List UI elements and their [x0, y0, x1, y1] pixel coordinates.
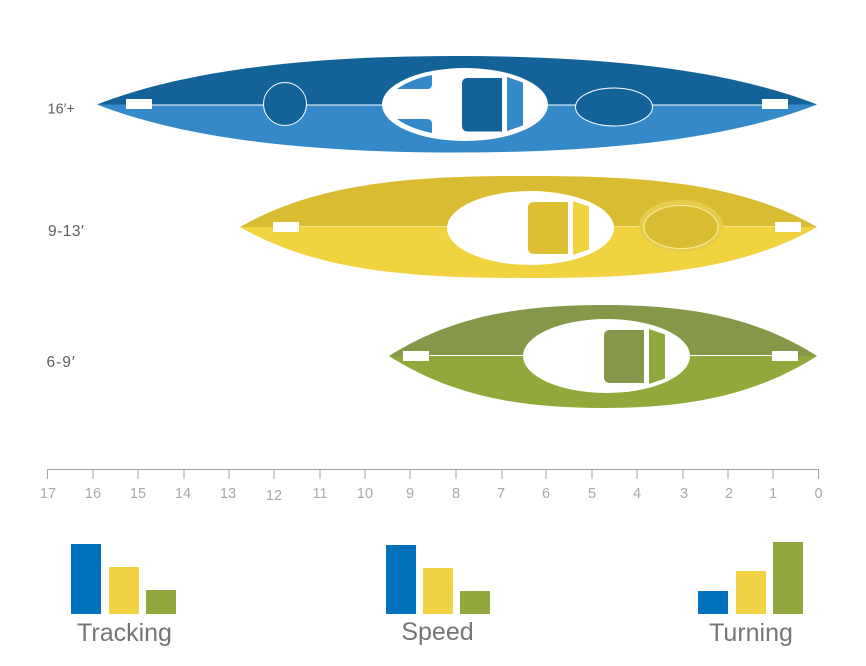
front grab handle	[772, 351, 798, 361]
front hatch: oval	[576, 88, 652, 126]
axis numbers: 1	[769, 486, 777, 502]
seat: blue	[462, 78, 502, 132]
hull top: blue	[97, 56, 817, 104]
axis numbers: 11	[312, 486, 328, 502]
bar chart: speed	[386, 545, 490, 646]
axis numbers: 17	[40, 486, 56, 502]
axis numbers: 15	[130, 486, 146, 502]
kayak: blue 16 foot	[97, 56, 817, 152]
axis numbers: 9	[406, 486, 414, 502]
axis numbers: 14	[175, 486, 191, 502]
cockpit: blue	[382, 68, 548, 141]
bar chart: turning	[698, 542, 803, 647]
axis numbers: 4	[633, 486, 641, 502]
axis numbers: 8	[452, 486, 460, 502]
hull top: green	[389, 305, 817, 356]
label: 16 feet and over: 16′+	[48, 102, 75, 118]
front grab handle	[775, 222, 801, 232]
axis numbers: 0	[814, 486, 823, 502]
bar chart: tracking	[71, 544, 176, 647]
storage well bottom	[397, 119, 432, 133]
axis numbers: 13	[220, 486, 236, 502]
keel line: green	[429, 354, 772, 356]
axis numbers: 3	[680, 486, 688, 502]
rear grab handle	[126, 99, 152, 109]
foot well: green	[649, 329, 665, 384]
keel line: yellow	[299, 226, 775, 228]
rear grab handle	[403, 351, 429, 361]
axis numbers: 5	[588, 486, 596, 502]
rear grab handle	[273, 222, 299, 232]
cockpit: green	[523, 319, 690, 393]
keel line: blue	[152, 104, 762, 106]
kayak: green 6 to 9 foot	[389, 305, 817, 408]
kayak: yellow 9 to 13 foot	[240, 176, 817, 278]
hull top: yellow	[240, 176, 817, 227]
chart label: turning: Turning	[709, 619, 793, 647]
hatch: oval	[644, 206, 718, 248]
foot well: blue	[507, 77, 523, 131]
axis numbers: 10	[357, 486, 373, 502]
rear hatch: round	[264, 82, 306, 126]
label: 9 to 13 feet: 9-13′	[48, 223, 84, 240]
front grab handle	[762, 99, 788, 109]
hatch rim	[639, 200, 723, 252]
axis numbers: 12	[266, 488, 282, 504]
axis numbers: 7	[497, 486, 505, 502]
seat: yellow	[528, 202, 568, 254]
foot well: yellow	[573, 201, 589, 255]
label: 6 to 9 feet: 6-9′	[46, 354, 76, 371]
axis numbers: 2	[725, 486, 733, 502]
length axis	[40, 470, 823, 504]
hull bottom: blue	[97, 104, 817, 152]
storage well top	[397, 75, 432, 89]
hull bottom: green	[389, 356, 817, 408]
axis numbers: 16	[85, 486, 101, 502]
cockpit: yellow	[447, 191, 614, 265]
axis numbers	[40, 486, 823, 504]
chart label: tracking: Tracking	[77, 619, 172, 647]
seat: green	[604, 330, 644, 383]
axis numbers: 6	[542, 486, 550, 502]
chart label: speed: Speed	[401, 618, 474, 646]
hull bottom: yellow	[240, 227, 817, 278]
